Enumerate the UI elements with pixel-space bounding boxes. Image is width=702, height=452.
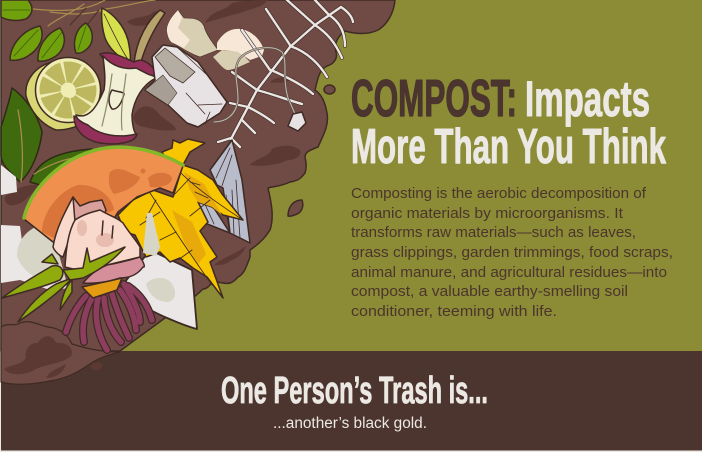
soil mass <box>1 0 395 351</box>
body paragraph: grass clippings, garden trimmings, food scraps, <box>351 244 673 261</box>
rose <box>53 197 144 283</box>
bone outlines <box>218 0 353 147</box>
pale paper scraps <box>1 165 197 329</box>
lemon slice <box>26 58 101 130</box>
footer subheading: ...another’s black gold. <box>273 415 427 432</box>
fish skeleton <box>218 0 353 147</box>
flower seed head <box>82 278 122 298</box>
body paragraph: transforms raw materials—such as leaves, <box>351 224 636 241</box>
heading <box>351 70 666 174</box>
soil clod lower <box>288 200 303 216</box>
yellow green leaf on apple <box>102 8 130 63</box>
tea bag and string <box>214 48 306 131</box>
plastic bag <box>145 45 227 127</box>
fish tail fin <box>182 140 250 243</box>
dead flower petals <box>66 284 152 350</box>
large green leaves at left <box>1 88 92 185</box>
rose sepals and stem <box>2 247 125 322</box>
yellow autumn leaves <box>118 139 243 298</box>
body paragraph: conditioner, teeming with life. <box>351 303 557 320</box>
heading: compost: COMPOST: <box>351 70 517 128</box>
panel: olive background <box>1 0 702 352</box>
body paragraph: animal manure, and agricultural residues—into <box>351 264 667 281</box>
body paragraph: Composting is the aerobic decomposition of <box>351 185 647 202</box>
footer heading: One Person’s Trash is... <box>221 370 488 412</box>
top left twigs and leaves <box>1 0 155 61</box>
pumpkin slice <box>24 147 183 242</box>
bone fills <box>218 0 353 147</box>
apple core <box>74 10 165 144</box>
body paragraph <box>351 185 673 320</box>
egg shell <box>167 10 264 70</box>
panel: dark brown footer band <box>1 351 702 450</box>
illustration: compost pile <box>1 0 395 384</box>
lower soil mound <box>1 322 120 384</box>
body paragraph: compost, a valuable earthy-smelling soil <box>351 283 628 300</box>
body paragraph: organic materials by microorganisms. It <box>351 205 624 222</box>
dark soil patches <box>4 0 300 378</box>
soil clod near heading <box>324 85 335 94</box>
